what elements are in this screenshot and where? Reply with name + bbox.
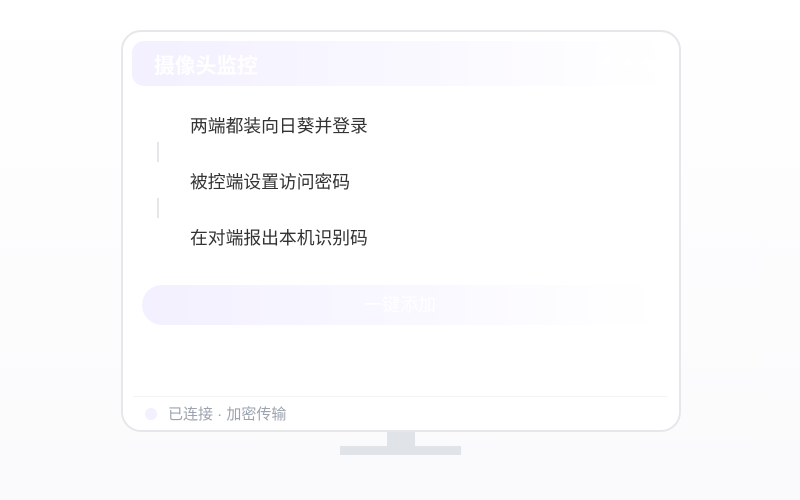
status dot — [145, 408, 157, 420]
heading: 摄像头监控 — [154, 55, 258, 78]
screen panel — [121, 30, 680, 432]
window dot 3 — [644, 58, 652, 66]
action button — [142, 285, 658, 325]
monitor stand base — [340, 446, 461, 455]
header bar — [132, 41, 669, 86]
connector 1 — [156, 142, 159, 162]
connector 2 — [156, 198, 159, 218]
step 2: 被控端设置访问密码 — [190, 172, 350, 192]
action button: 一键添加 — [364, 295, 436, 315]
window dot 2 — [624, 58, 632, 66]
window dot 1 — [603, 58, 611, 66]
step 3: 在对端报出本机识别码 — [190, 228, 368, 248]
footer divider — [133, 396, 668, 397]
status text: 已连接 · 加密传输 — [168, 406, 286, 423]
monitor stand neck — [387, 431, 415, 446]
step 1: 两端都装向日葵并登录 — [190, 116, 368, 136]
